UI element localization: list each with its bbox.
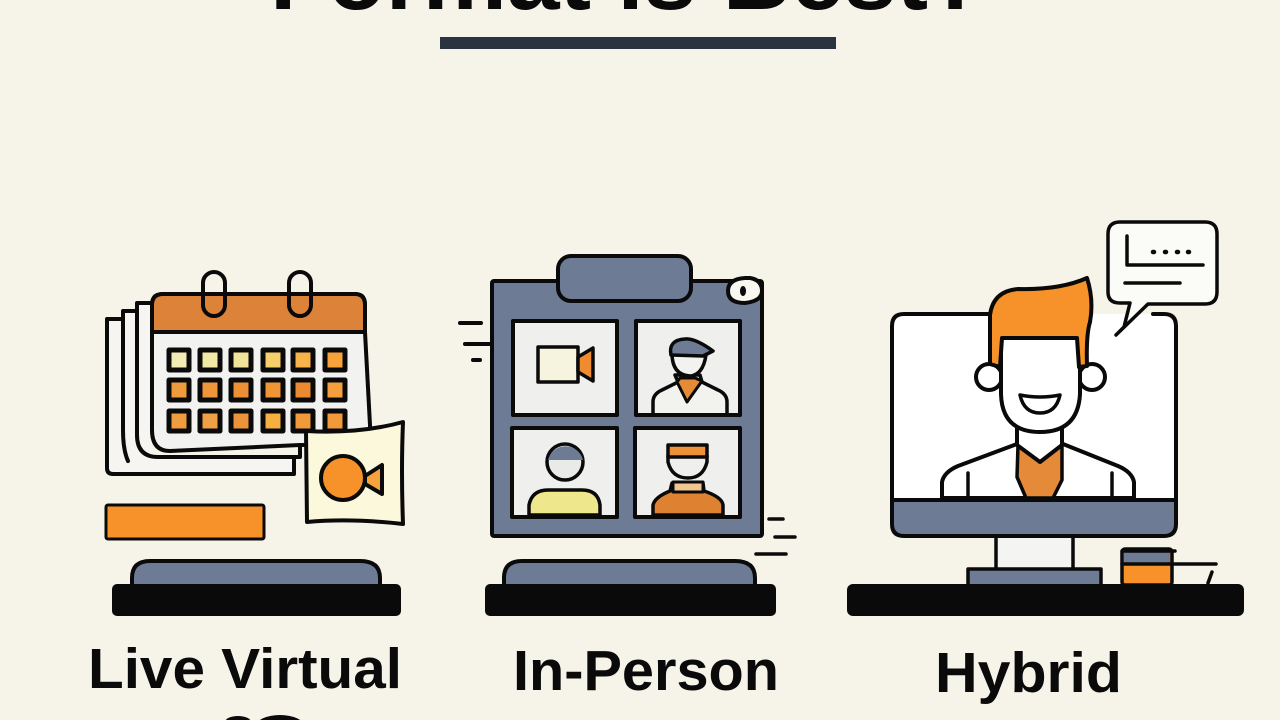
icon: monitor stand foot bbox=[968, 569, 1101, 587]
shoulders bbox=[942, 444, 1134, 498]
motion lines right bbox=[756, 519, 795, 554]
icon: sticky note with video camera bbox=[306, 422, 403, 524]
hair bbox=[990, 278, 1091, 367]
video cell: camera bbox=[513, 321, 617, 415]
icon: mug on desk bbox=[1122, 549, 1216, 585]
label: hybrid: Hybrid bbox=[935, 641, 1122, 705]
icon: calendar stacked pages bbox=[107, 303, 300, 474]
icon: speech bubble bbox=[1108, 222, 1217, 335]
ears bbox=[976, 364, 1002, 390]
calendar day squares bbox=[169, 350, 345, 431]
icon: base stand bbox=[485, 561, 776, 616]
panel: in-person bbox=[460, 256, 795, 616]
video cell: person yellow bbox=[512, 428, 617, 517]
video cell: person orange bbox=[635, 428, 740, 517]
label: live virtual: Live Virtual bbox=[88, 637, 402, 701]
panel: hybrid bbox=[847, 222, 1244, 616]
mouth bbox=[1020, 395, 1060, 413]
icon: desk base bbox=[847, 584, 1244, 616]
tie bbox=[1017, 445, 1062, 498]
neck bbox=[1017, 428, 1062, 462]
icon: base stand bbox=[112, 561, 401, 616]
icon: calendar bbox=[152, 272, 370, 451]
clipped second line of label bbox=[225, 715, 304, 720]
label: in-person: In-Person bbox=[513, 639, 779, 703]
orange bar bbox=[106, 505, 264, 539]
icon: monitor stand neck bbox=[996, 536, 1073, 570]
face bbox=[1001, 330, 1080, 432]
panel: live virtual bbox=[106, 272, 403, 616]
icon: monitor bbox=[892, 314, 1176, 536]
motion lines left bbox=[460, 323, 489, 360]
title underline bbox=[440, 37, 836, 49]
tablet top handle bbox=[558, 256, 691, 301]
icon: presenter bbox=[942, 278, 1134, 498]
video cell: person with cap bbox=[636, 321, 740, 415]
tablet camera bbox=[728, 278, 762, 303]
icon: tablet body bbox=[492, 281, 762, 536]
